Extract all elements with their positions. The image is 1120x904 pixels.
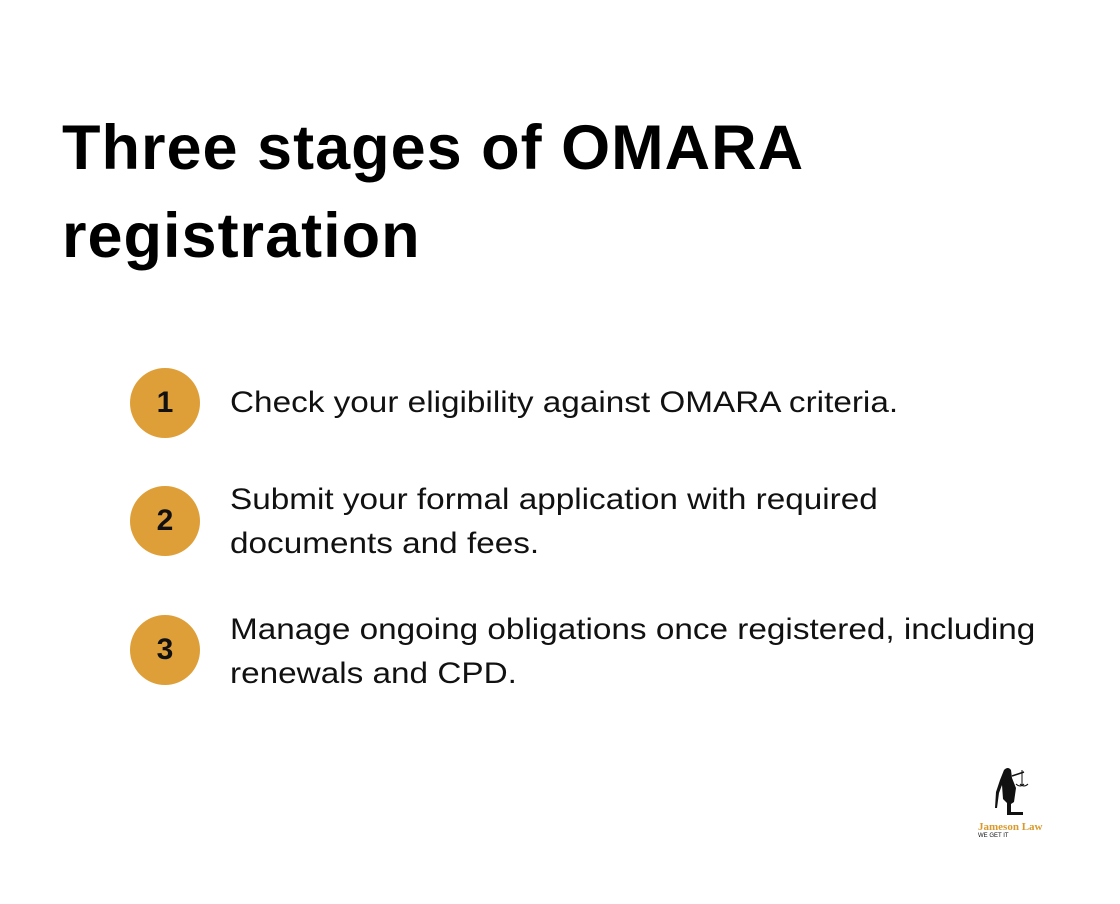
icon: number 3: 3 bbox=[157, 633, 173, 666]
title bbox=[62, 113, 804, 271]
icon: number 2: 2 bbox=[157, 504, 173, 537]
step 3 bbox=[130, 613, 1035, 690]
icon: number 1 bbox=[130, 368, 200, 438]
text: step 3: renewals and CPD. bbox=[230, 657, 517, 690]
icon: number 3 bbox=[130, 615, 200, 685]
text: step 1: Check your eligibility against OMARA criteria. bbox=[230, 386, 898, 419]
icon: number 1: 1 bbox=[157, 386, 173, 419]
text: step 3 bbox=[230, 613, 1035, 690]
step 1 bbox=[130, 368, 898, 438]
step 2 bbox=[130, 483, 878, 560]
logo: WE GET IT bbox=[978, 833, 1009, 839]
text: step 2: Submit your formal application with required bbox=[230, 483, 878, 516]
text: step 2 bbox=[230, 483, 878, 560]
logo: Jameson Law bbox=[978, 821, 1042, 833]
title: Three stages of OMARA bbox=[62, 113, 804, 183]
text: step 3: Manage ongoing obligations once registered, including bbox=[230, 613, 1035, 646]
title: registration bbox=[62, 201, 421, 271]
icon: number 2 bbox=[130, 486, 200, 556]
logo bbox=[978, 768, 1042, 839]
text: step 2: documents and fees. bbox=[230, 527, 539, 560]
